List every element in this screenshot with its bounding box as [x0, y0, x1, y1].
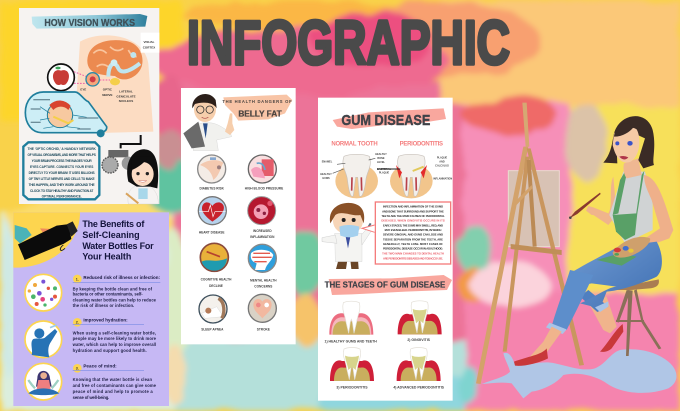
eye diagram	[25, 92, 107, 137]
label row 2: HEART DISEASE	[199, 230, 224, 234]
item 3 text	[73, 363, 157, 400]
heading: benefits: The Benefits of	[82, 219, 145, 229]
heading: belly fat	[222, 95, 292, 121]
stage 2: gingivitis	[398, 301, 442, 342]
label row 1: DIABETES RISK	[199, 187, 225, 191]
item 1 text: By keeping the bottle clean and free of	[73, 286, 153, 291]
periodontitis tooth: AND	[439, 160, 445, 163]
periodontitis tooth	[377, 142, 452, 198]
eye small	[74, 72, 110, 86]
periodontitis tooth: PERIODONTITIS	[400, 142, 443, 148]
icon: dentist	[322, 203, 372, 269]
label: visual cortex: VISUAL	[144, 40, 155, 44]
head silhouette	[77, 35, 153, 133]
eye labels	[80, 88, 136, 103]
text box: optic nerve description: THE 'OPTIC ORCHID,' A HANDILY NETWORK	[27, 147, 97, 151]
heading: benefits	[82, 219, 154, 262]
heading: benefits: Your Health	[82, 252, 131, 262]
item 2 text: 2.	[76, 321, 79, 325]
text box: optic nerve description: OF TINY LITTLE NERVES AND CELLS TO MAKE	[29, 177, 95, 181]
panel: belly fat	[181, 88, 296, 344]
arm left back	[588, 177, 617, 225]
icon: meditation	[25, 363, 62, 400]
item 3 text: peace of mind and help to promote a	[73, 389, 153, 394]
normal tooth	[320, 142, 387, 198]
item 3 text: 3.	[76, 367, 79, 371]
item 3 text: and free of contaminants can give some	[73, 383, 157, 388]
heading: gum disease: GUM DISEASE	[341, 113, 431, 129]
label: visual cortex: CORTEX	[143, 45, 155, 49]
eye labels: GENICULATE	[116, 94, 136, 98]
paint puddle	[482, 349, 676, 398]
callout: periodontitis text: AND BONE THAT SURROUND AND SUPPORT THE	[382, 209, 444, 213]
icon: bacteria circle	[25, 274, 62, 311]
text box: optic nerve description: THIS HAPPEN, AND THEY WORK AROUND THE	[29, 183, 95, 187]
item 2 text: hydration and support good health.	[73, 348, 147, 353]
label row 1: HIGH BLOOD PRESSURE	[245, 187, 283, 191]
heading: benefits: Self-Cleaning	[82, 230, 140, 240]
callout: periodontitis text: TEETH ARE THE MAIN CAUSES OF PERIODONTAL	[381, 214, 445, 218]
heading: how vision works: HOW VISION WORKS	[44, 18, 135, 29]
icon: cognitive health	[200, 243, 228, 271]
label: visual cortex	[141, 33, 159, 53]
normal tooth: BONE	[377, 157, 385, 160]
label row 3	[201, 278, 277, 289]
normal tooth: ENAMEL	[322, 161, 333, 164]
rear leg and shoes	[580, 290, 623, 352]
text box: optic nerve description: EYES CAPTURE. CONNECTS YOUR EYES	[30, 165, 93, 169]
item 3 text: Peace of mind:	[83, 363, 117, 368]
label row 3: CONCERNS	[254, 285, 272, 289]
normal tooth: HEALTHY	[320, 173, 332, 176]
callout: periodontitis text: EARLY STAGES, THE GUMS MAY SWELL, RED, AND	[383, 223, 443, 227]
arm right	[643, 175, 673, 247]
jeans	[546, 242, 662, 334]
item 1 text: Reduced risk of illness or infection:	[83, 275, 160, 280]
apron bottom	[597, 253, 637, 266]
eye labels: EYE	[80, 88, 86, 92]
heading: stages of gum disease: THE STAGES OF GUM DISEASE	[325, 279, 446, 289]
panel: self-cleaning water bottles	[13, 212, 169, 406]
normal tooth: HEALTHY	[375, 153, 387, 156]
label row 3: COGNITIVE HEALTH	[201, 278, 232, 282]
periodontitis tooth: PLAQUE	[437, 156, 448, 159]
text box: optic nerve description: OF VISUAL ORGANISMS, AND MORE THAT HELPS	[27, 153, 96, 157]
item 1 text: 1.	[76, 277, 79, 281]
label row 4	[201, 327, 270, 331]
item 1 text	[73, 275, 160, 308]
periodontitis tooth: CALCULUS	[435, 164, 449, 167]
periodontitis tooth: BACTERIAL	[377, 168, 392, 171]
callout: periodontitis text: INFECTION AND INFLAMMATION OF THE GUMS	[383, 205, 443, 209]
icon: stroke	[248, 294, 276, 322]
text box: optic nerve description: CLOCK TO STAY HEALTHY AND FUNCTION AT	[30, 189, 93, 193]
text box: optic nerve description: YOUR BRAIN PROCESS THE IMAGES YOUR	[32, 159, 92, 163]
text box: optic nerve description: DIRECTLY TO YOUR BRAIN! IT USES BILLIONS	[29, 171, 95, 175]
stage 4: advanced periodontitis: 4) ADVANCED PERIODONTITIS	[393, 386, 445, 390]
icon: mental health	[248, 244, 276, 272]
label row 2: INFLAMMATION	[250, 235, 275, 239]
heading: belly fat: THE HEALTH DANGERS OF	[222, 99, 292, 104]
illustration: artist at easel	[476, 103, 676, 398]
stage 3: periodontitis	[330, 347, 374, 390]
normal tooth: LEVEL	[377, 161, 385, 164]
eye labels: NUCLEUS	[119, 99, 133, 103]
callout: periodontitis text: MAY EVEN BLEED. PERIODONTITIS, IN WHICH	[385, 228, 441, 232]
label row 1	[199, 187, 283, 191]
torso	[609, 171, 653, 243]
stage 1: healthy	[324, 301, 377, 343]
icon: high blood pressure	[248, 155, 276, 183]
periodontitis tooth: PLAQUE	[379, 172, 390, 175]
palette	[613, 237, 650, 258]
stage 1: healthy: 1) HEALTHY GUMS AND TEETH	[324, 339, 377, 343]
text box: optic nerve description	[23, 142, 99, 199]
text box: optic nerve description: OPTIMAL PERFORMANCE.	[42, 194, 82, 198]
icon: water bottle	[15, 221, 78, 260]
eye labels: NERVE	[102, 93, 112, 97]
normal tooth: GUMS	[322, 177, 330, 180]
callout: periodontitis text: PERIODONTAL DISEASE OCCUR IN ADULTHOOD.	[383, 247, 443, 251]
panel: how vision works	[19, 8, 159, 204]
hand and brush	[569, 193, 601, 219]
stage 4: advanced periodontitis	[393, 347, 445, 390]
icon: brain	[87, 40, 143, 85]
item 1 text: bacteria or other contaminants, self-	[73, 292, 143, 297]
heading: belly fat: BELLY FAT	[238, 108, 282, 118]
eye labels: OPTIC	[103, 88, 113, 92]
item 2 text: water, which can help to improve overall	[72, 342, 156, 347]
callout: periodontitis text: TISSUE SEPARATION FROM THE TEETH, ARE	[383, 237, 443, 241]
label row 3: MENTAL HEALTH	[250, 279, 277, 283]
panel: gum disease	[318, 98, 453, 401]
label row 2: INCREASED	[253, 229, 272, 233]
item 1 text: cleaning water bottles can help to reduce	[73, 297, 157, 302]
heading: stages of gum disease	[325, 275, 452, 295]
item 1 text: the risk of illness or infection.	[73, 303, 134, 308]
item 3 text: Knowing that the water bottle is clean	[73, 377, 152, 382]
eye labels: LATERAL	[119, 90, 133, 94]
periodontitis tooth: INFLAMMATION	[433, 177, 452, 180]
label row 2	[199, 229, 275, 239]
callout: periodontitis text: SEVERE GINGIVAL AND GUMS CAN LOSE AND	[383, 233, 443, 237]
normal tooth: NORMAL TOOTH	[331, 142, 378, 148]
item 2 text: When using a self-cleaning water bottle,	[73, 330, 156, 335]
icon: inflammation	[248, 197, 276, 225]
icon: phoropter	[102, 135, 141, 173]
icon: person drinking	[25, 321, 62, 358]
label row 4: STROKE	[257, 327, 270, 331]
stool	[610, 279, 661, 356]
icon: sleep apnea	[199, 295, 227, 323]
head	[603, 116, 654, 178]
icon: heart disease	[198, 197, 226, 225]
label row 3: DECLINE	[209, 284, 223, 288]
callout: periodontitis text: GENERALLY, TEETH LOSE. MOST CASES OF	[383, 242, 443, 246]
yellow corner shape	[13, 212, 80, 268]
callout: periodontitis text: ARE PERIODONTITIS DISEASES AND TOBACCO USE.	[383, 257, 443, 261]
item 2 text	[72, 317, 157, 353]
shoe front	[514, 348, 548, 366]
icon: optometrist	[126, 149, 158, 204]
heading: benefits: Water Bottles For	[82, 241, 154, 251]
item 3 text: sense of well-being.	[73, 395, 109, 400]
label row 4: SLEEP APNEA	[201, 327, 224, 331]
heading: how vision works	[32, 14, 147, 29]
title: INFOGRAPHIC: INFOGRAPHIC	[187, 9, 510, 78]
item 2 text: Improved hydration:	[83, 317, 128, 322]
callout: periodontitis text: DISEASES. WHEN GINGIVITIS OCCURS IN ITS	[381, 219, 445, 223]
icon: apple	[48, 64, 74, 91]
front leg	[528, 327, 562, 358]
easel	[476, 103, 584, 384]
stage 2: gingivitis: 2) GINGIVITIS	[407, 338, 431, 342]
icon: doctor	[183, 94, 234, 151]
callout: periodontitis text	[362, 202, 451, 264]
icon: diabetes	[198, 155, 226, 183]
stage 3: periodontitis: 3) PERIODONTITIS	[336, 386, 368, 390]
item 2 text: people may be more likely to drink more	[73, 336, 157, 341]
callout: periodontitis text: THE TWO MAIN CHANGES TO DENTAL HEALTH	[382, 251, 444, 255]
